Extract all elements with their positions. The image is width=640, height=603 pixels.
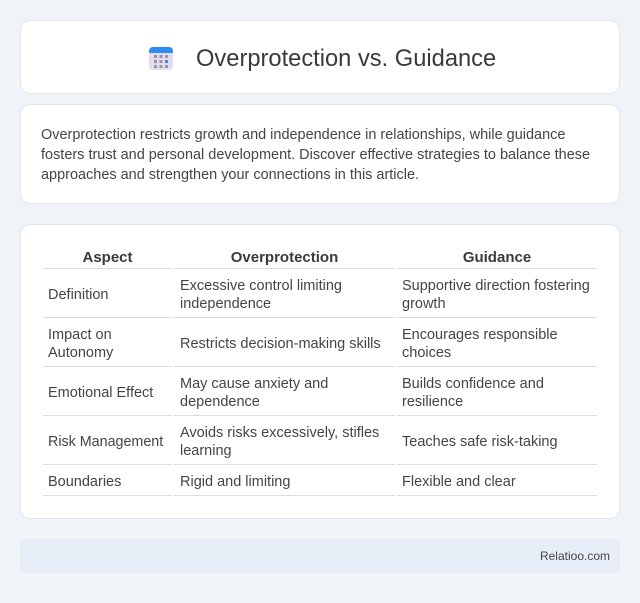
row: risk management: Risk Management xyxy=(48,434,163,450)
row: emotional effect: Emotional Effect xyxy=(48,385,153,401)
row: impact on autonomy: Impact on xyxy=(48,327,112,343)
intro text: fosters trust and personal development. Discover effective strategies to balance these xyxy=(41,147,590,163)
icon: calendar xyxy=(149,47,173,70)
row: definition: Definition xyxy=(48,287,108,303)
row: definition: Supportive direction fostering xyxy=(402,278,590,294)
header: aspect: Aspect xyxy=(82,249,133,266)
footer bar xyxy=(20,539,620,573)
row: impact on autonomy: Restricts decision-making skills xyxy=(180,336,381,352)
row: risk management xyxy=(48,425,558,459)
header: overprotection: Overprotection xyxy=(231,249,338,266)
intro card xyxy=(20,104,620,204)
intro text: approaches and strengthen your connections in this article. xyxy=(41,167,419,183)
row: risk management: Teaches safe risk-taking xyxy=(402,434,558,450)
row: risk management: Avoids risks excessively, stifles xyxy=(180,425,379,441)
header: guidance: Guidance xyxy=(463,249,531,266)
row: impact on autonomy xyxy=(48,327,558,361)
row: risk management: learning xyxy=(180,443,232,459)
row: definition: independence xyxy=(180,296,271,312)
row: emotional effect xyxy=(48,376,544,410)
intro text: Overprotection restricts growth and independence in relationships, while guidance xyxy=(41,127,565,143)
row: impact on autonomy: choices xyxy=(402,345,451,361)
row: boundaries: Boundaries xyxy=(48,474,121,490)
title card xyxy=(20,20,620,94)
row: definition xyxy=(48,278,590,312)
table panel xyxy=(20,224,620,519)
intro text xyxy=(41,127,590,183)
row: impact on autonomy: Autonomy xyxy=(48,345,113,361)
row: boundaries xyxy=(48,474,516,490)
row: emotional effect: Builds confidence and xyxy=(402,376,544,392)
row: definition: Excessive control limiting xyxy=(180,278,342,294)
row: emotional effect: resilience xyxy=(402,394,463,410)
row: emotional effect: dependence xyxy=(180,394,260,410)
row: definition: growth xyxy=(402,296,446,312)
row: emotional effect: May cause anxiety and xyxy=(180,376,328,392)
footer text: Relatioo.com xyxy=(540,549,610,563)
title: Overprotection vs. Guidance xyxy=(196,46,496,72)
row: boundaries: Rigid and limiting xyxy=(180,474,290,490)
row: impact on autonomy: Encourages responsible xyxy=(402,327,558,343)
row: boundaries: Flexible and clear xyxy=(402,474,516,490)
